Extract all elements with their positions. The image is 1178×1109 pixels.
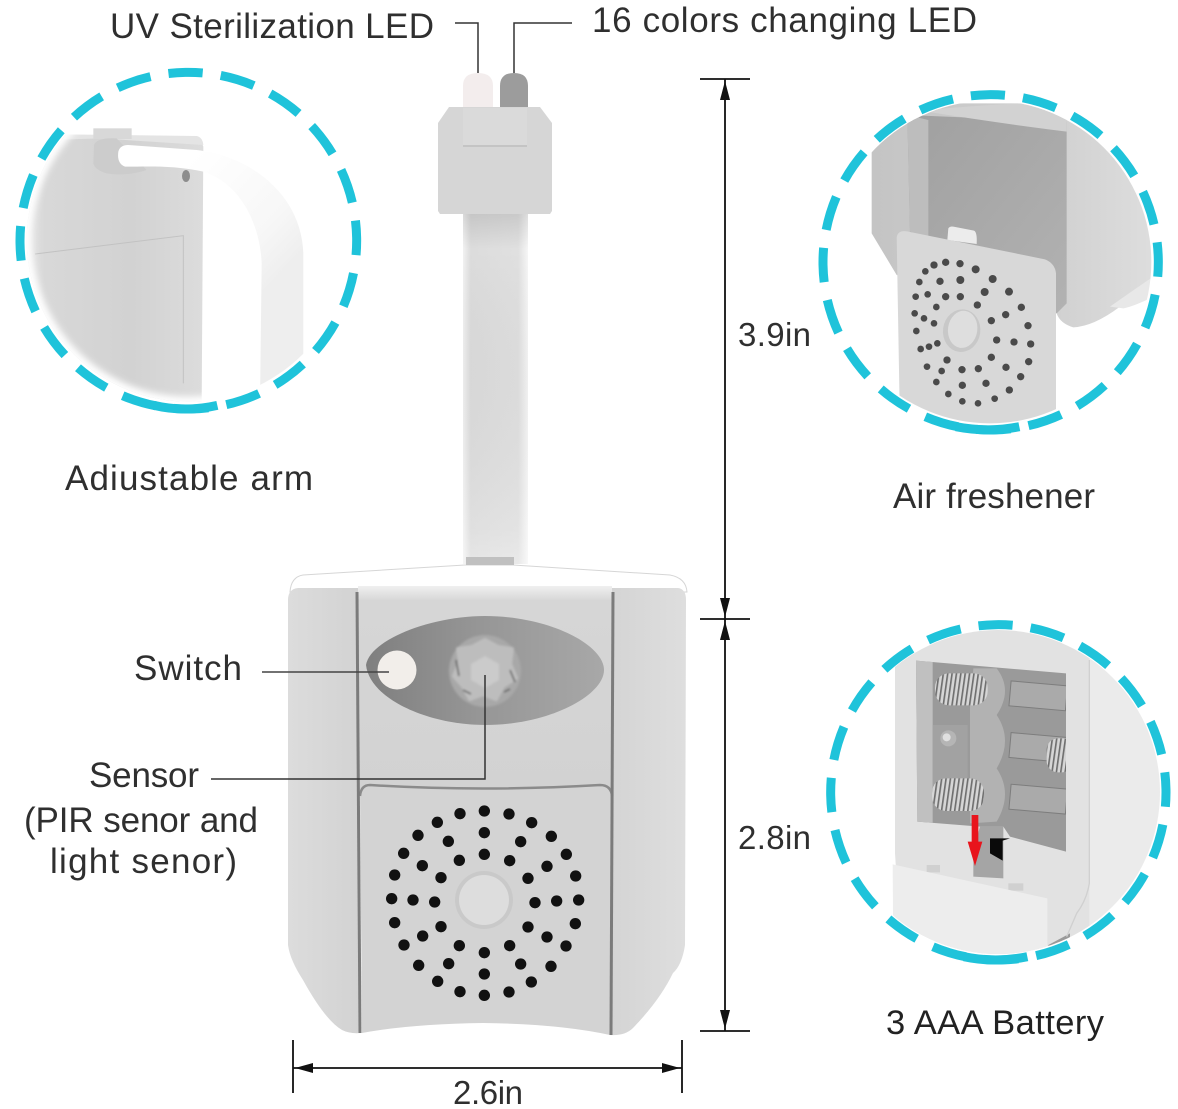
cavity xyxy=(907,115,1067,313)
door centre lens xyxy=(455,871,513,929)
dimension: 2.8in height arrow xyxy=(700,619,750,1031)
housing xyxy=(895,627,1090,957)
compartment left wall xyxy=(916,660,933,823)
body top lip xyxy=(290,565,687,592)
spring top xyxy=(935,673,988,705)
label: Air freshener: Air freshener xyxy=(893,477,1095,516)
dashed ring: top right xyxy=(820,92,1161,433)
label: 16 colors changing LED: 16 colors changing LED xyxy=(592,1,977,40)
leader line: UV LED xyxy=(455,23,478,73)
fade edge xyxy=(26,134,202,402)
dimension: 2.6in width arrow xyxy=(293,1040,682,1093)
speaker door xyxy=(360,785,612,1035)
colour LED xyxy=(500,73,528,107)
spring bottom xyxy=(932,778,984,811)
battery cover xyxy=(893,864,1047,960)
label: PIR senor and: (PIR senor and xyxy=(24,801,258,840)
leader line: switch xyxy=(262,671,389,673)
lid top band xyxy=(927,102,1067,132)
label: UV Sterilization LED: UV Sterilization LED xyxy=(110,7,434,46)
UV LED xyxy=(463,73,493,107)
housing right side xyxy=(1090,659,1160,925)
housing edge xyxy=(1067,660,1089,937)
cavity inner rail xyxy=(907,115,928,240)
label: light senor: light senor) xyxy=(50,842,237,881)
inset: adjustable arm xyxy=(17,69,360,412)
device: main product xyxy=(211,73,687,1035)
rear housing xyxy=(872,103,1157,327)
contact plate xyxy=(940,730,956,746)
cover tabs xyxy=(927,865,1023,891)
clip tab xyxy=(93,128,132,139)
latch notch xyxy=(973,827,1003,878)
battery cell rows xyxy=(1009,681,1068,814)
door outline xyxy=(360,785,612,796)
body side right xyxy=(610,588,686,1035)
arm mount xyxy=(94,138,118,170)
door holes xyxy=(911,259,1034,407)
inset: air freshener xyxy=(820,92,1161,433)
panel seam right xyxy=(611,592,613,1035)
switch button xyxy=(378,650,416,690)
speaker holes xyxy=(386,805,584,1001)
arm xyxy=(118,145,303,403)
screw xyxy=(182,170,190,182)
air freshener door xyxy=(897,231,1056,427)
housing top edge xyxy=(70,134,204,145)
door latch xyxy=(947,227,977,244)
spring right xyxy=(1046,738,1066,772)
inset: 3 AAA battery xyxy=(828,622,1169,963)
sensor oval xyxy=(366,616,604,725)
strap xyxy=(463,214,528,564)
red arrow xyxy=(968,815,982,866)
body side left xyxy=(288,588,361,1033)
panel seam left xyxy=(357,592,360,1033)
scalloped divider xyxy=(970,668,1005,823)
label: Sensor: Sensor xyxy=(89,756,199,795)
shadow sliver xyxy=(1048,934,1070,946)
dimension label 2.8in: 2.8in xyxy=(738,819,811,856)
dimension label 3.9in: 3.9in xyxy=(738,316,811,353)
strap clip xyxy=(466,557,514,565)
PIR sensor lens xyxy=(449,635,521,707)
housing corner highlight xyxy=(1110,279,1150,308)
leader line: sensor xyxy=(211,675,485,779)
connector head xyxy=(438,107,552,214)
label: Switch: Switch xyxy=(134,649,242,688)
dimension: 3.9in height arrow xyxy=(700,79,750,619)
dashed ring: left xyxy=(17,69,360,412)
body centre panel xyxy=(358,586,612,796)
black catch xyxy=(990,838,1010,861)
label: 3 AAA Battery: 3 AAA Battery xyxy=(886,1004,1105,1042)
door lens xyxy=(943,310,980,352)
battery compartment xyxy=(916,661,1066,852)
label: Adiustable arm: Adiustable arm xyxy=(65,459,313,498)
housing seam xyxy=(35,236,183,383)
housing rear xyxy=(20,135,203,403)
dashed ring: bottom right xyxy=(828,622,1169,963)
leader line: colour LED xyxy=(514,23,572,73)
